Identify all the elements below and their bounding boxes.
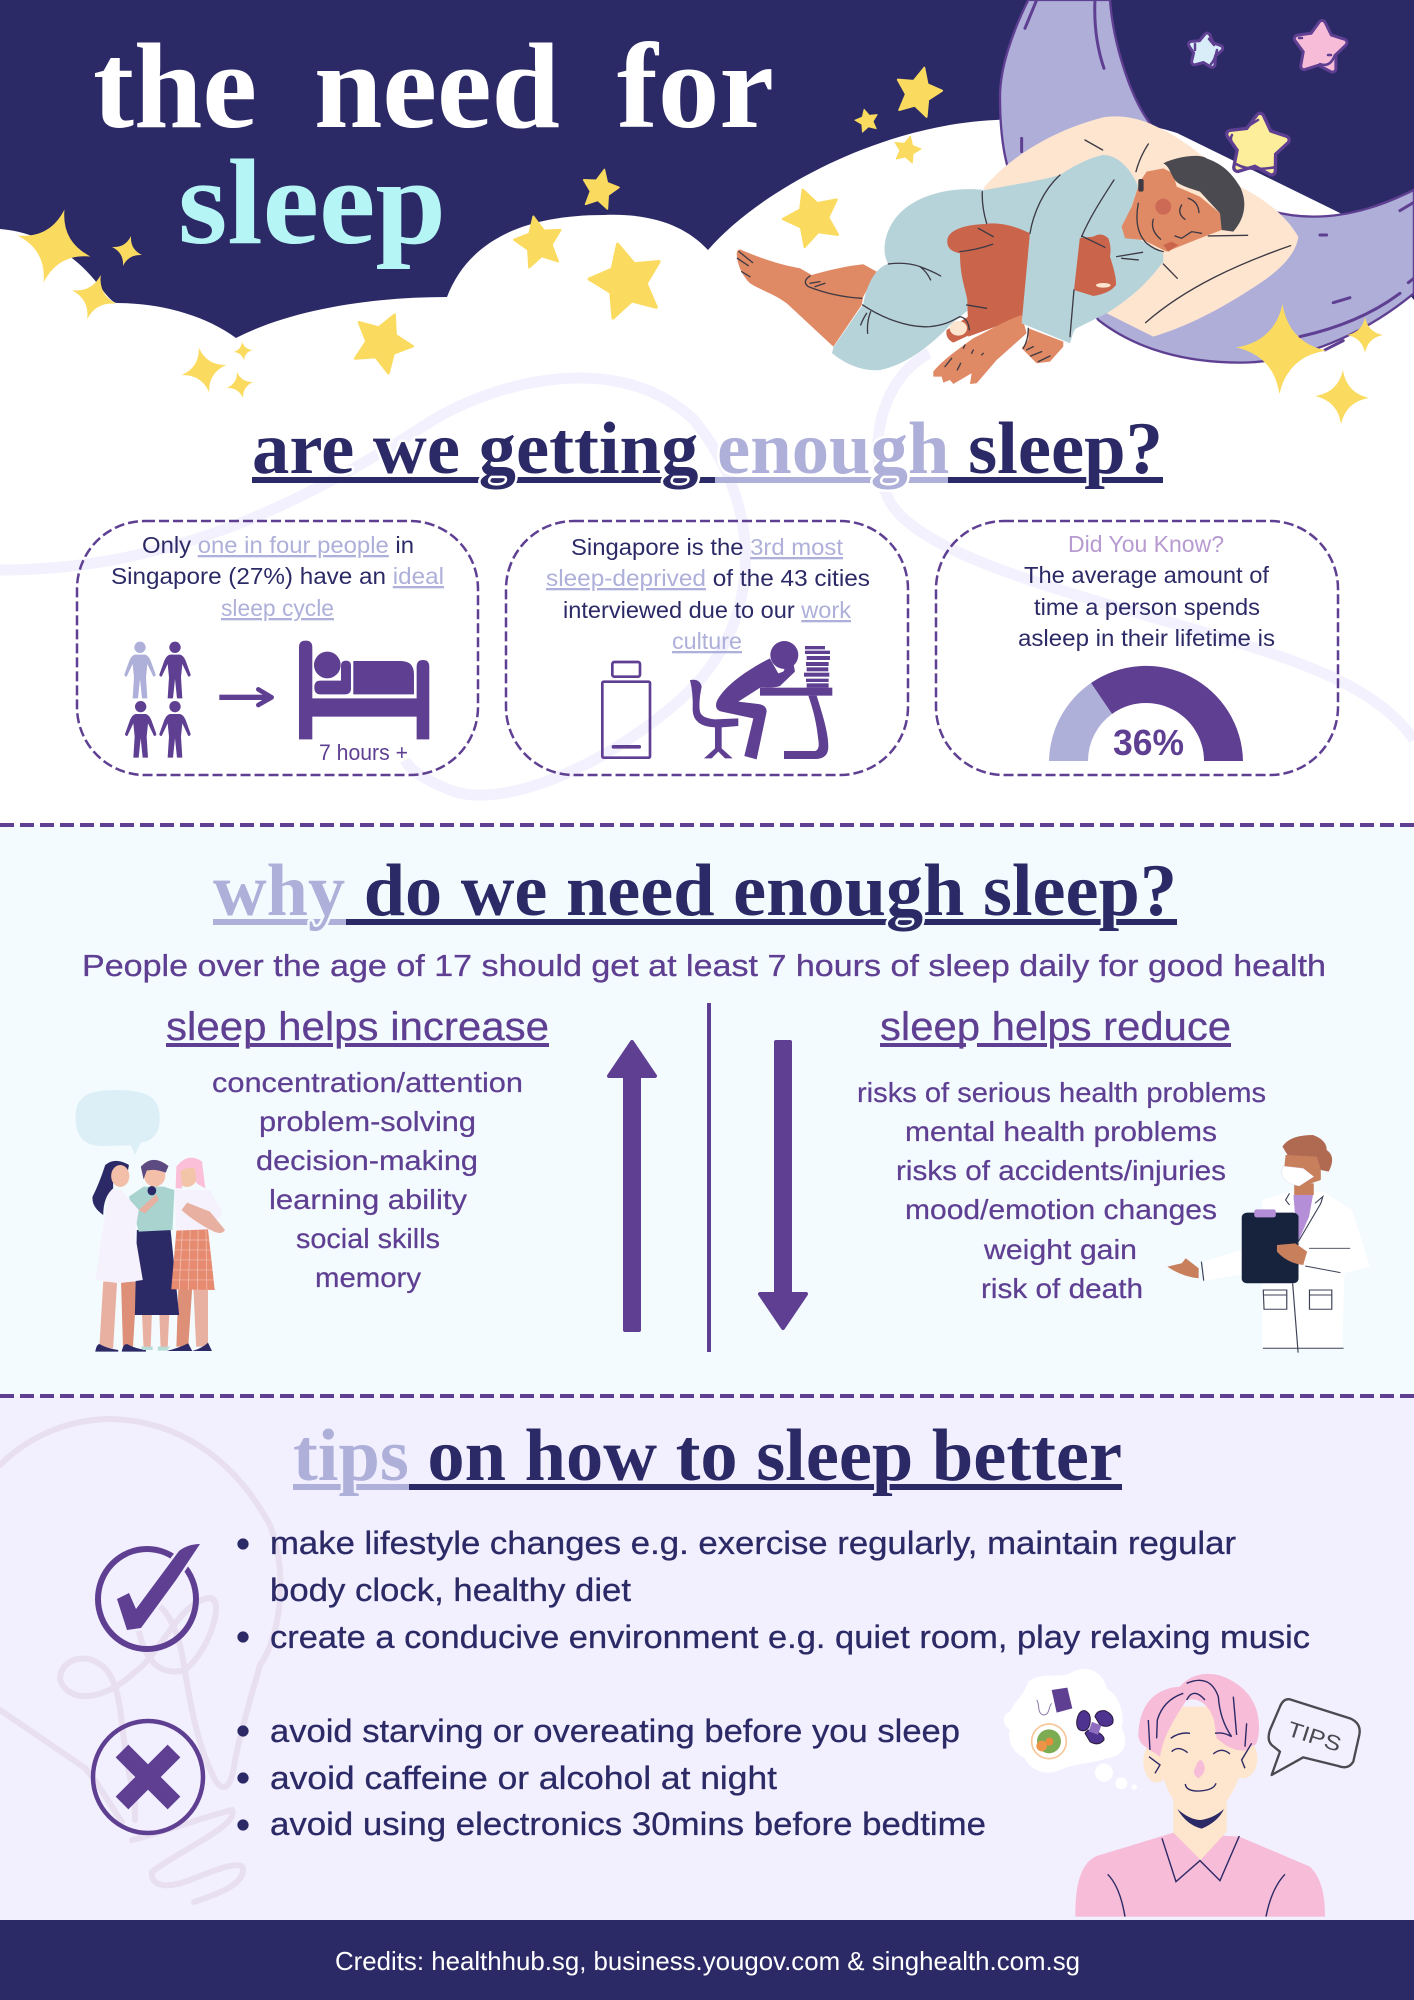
card text: asleep in their lifetime is — [1018, 625, 1275, 651]
title: the need for — [93, 19, 774, 154]
list: avoid — [238, 1713, 986, 1842]
list: reduce: mental health problems — [905, 1116, 1217, 1147]
list: increase: problem-solving — [259, 1106, 476, 1137]
card text: sleep-deprived of the 43 cities — [546, 565, 870, 591]
list: reduce: weight gain — [983, 1234, 1137, 1265]
card text — [546, 534, 870, 654]
list: do: make lifestyle changes e.g. exercise regularly, maintain regular — [270, 1525, 1236, 1561]
list: increase: memory — [315, 1262, 421, 1293]
arrow: up — [609, 1042, 655, 1330]
card text: Did You Know? — [1068, 531, 1224, 557]
list: avoid: avoid starving or overeating before you sleep — [270, 1713, 960, 1749]
list: do — [238, 1525, 1310, 1655]
heading: tips on how to sleep better: tips on how to sleep better — [293, 1415, 1122, 1497]
panel: header banner — [0, 0, 1414, 425]
heading: why do we need enough sleep: why do we need enough sleep? — [213, 850, 1177, 932]
arrow: down — [760, 1042, 806, 1328]
subtitle: People over the age of 17 should get at least 7 hours of sleep daily for good health — [82, 948, 1326, 983]
list: increase — [212, 1067, 523, 1293]
card text: The average amount of — [1024, 562, 1270, 588]
list: reduce: risks of accidents/injuries — [896, 1155, 1226, 1186]
heading: are we getting enough sleep: are we getting enough sleep? — [252, 408, 1163, 490]
card text: Singapore (27%) have an ideal — [111, 563, 444, 589]
dashed dividers — [0, 825, 1414, 1396]
icon: bulb scribble background — [0, 1419, 280, 1902]
list: increase: decision-making — [256, 1145, 478, 1176]
card text — [1018, 531, 1275, 651]
chart: 36 percent gauge — [1049, 666, 1243, 763]
credits: Credits: healthhub.sg, business.yougov.com & singhealth.com.sg — [335, 1946, 1080, 1976]
panel: tips section background — [0, 1396, 1414, 1920]
card text: sleep cycle — [221, 595, 334, 621]
list: reduce: risk of death — [981, 1273, 1143, 1304]
speech bubble: TIPS — [1269, 1699, 1360, 1775]
footer — [0, 1920, 1414, 2000]
icon: check mark — [98, 1544, 200, 1649]
column: sleep helps increase — [166, 1005, 549, 1293]
title — [93, 19, 774, 270]
list: avoid: avoid caffeine or alcohol at night — [270, 1760, 777, 1796]
list: increase: social skills — [296, 1223, 440, 1254]
icon: three women with speech bubble — [76, 1090, 225, 1352]
card text: interviewed due to our work — [563, 597, 852, 623]
list: reduce: risks of serious health problems — [857, 1077, 1266, 1108]
list: increase: learning ability — [269, 1184, 467, 1215]
icon: four people arrow bed — [124, 641, 429, 758]
card text: time a person spends — [1034, 594, 1260, 620]
decorative swirls — [0, 353, 1414, 795]
icon: cross mark — [93, 1721, 203, 1833]
stars — [7, 62, 1383, 425]
card text: Only one in four people in — [142, 532, 414, 558]
column: sleep helps reduce: sleep helps reduce — [880, 1005, 1231, 1049]
column: sleep helps reduce — [857, 1005, 1266, 1304]
card text: Singapore is the 3rd most — [571, 534, 844, 560]
panel: singapore sleep deprived — [506, 521, 908, 775]
crescent moon — [1000, 0, 1414, 363]
wavy stars — [1189, 22, 1345, 172]
list: reduce — [857, 1077, 1266, 1304]
icon: doctor with clipboard — [1167, 1135, 1370, 1353]
column: sleep helps increase: sleep helps increase — [166, 1005, 549, 1049]
title: sleep — [178, 135, 446, 270]
card text: culture — [672, 628, 742, 654]
panel: why section background — [0, 825, 1414, 1396]
divider — [707, 1003, 711, 1352]
list: avoid: avoid using electronics 30mins before bedtime — [270, 1806, 986, 1842]
panel: did you know — [936, 521, 1338, 775]
label: 7 hours: 7 hours + — [319, 740, 408, 765]
list: increase: concentration/attention — [212, 1067, 523, 1098]
chart: 36 percent gauge: 36% — [1113, 722, 1184, 763]
list: do: create a conducive environment e.g. quiet room, play relaxing music — [270, 1619, 1310, 1655]
thought bubble — [1004, 1669, 1137, 1790]
icon: sleeping person hugging teddy bear — [737, 116, 1298, 384]
white cloud — [0, 117, 1414, 420]
icon: man with pink hair — [1004, 1669, 1360, 1917]
icon: phone and exhausted worker — [602, 641, 832, 759]
panel: one in four — [77, 521, 478, 775]
list: reduce: mood/emotion changes — [905, 1194, 1217, 1225]
list: do: body clock, healthy diet — [270, 1572, 631, 1608]
card text — [111, 532, 444, 621]
speech bubble: TIPS: TIPS — [1284, 1717, 1344, 1757]
